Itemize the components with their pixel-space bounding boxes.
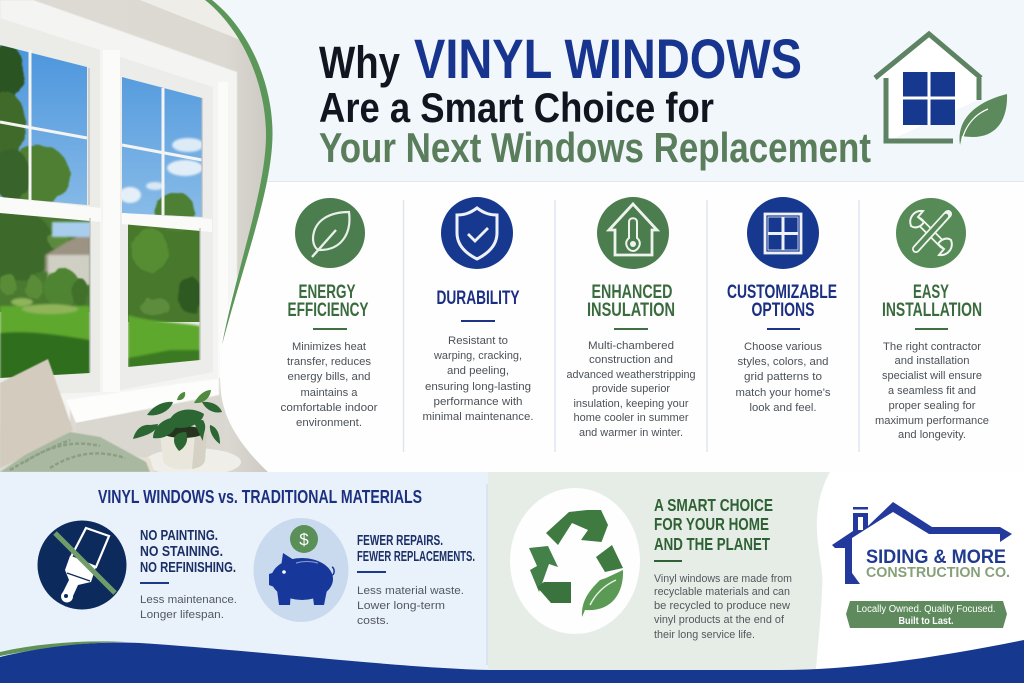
panel: customizable options: CUSTOMIZABLE bbox=[727, 281, 837, 303]
text: smart choice: Vinyl windows are made from bbox=[654, 573, 792, 585]
icon: logo roof bbox=[832, 502, 1012, 584]
text: no painting: NO REFINISHING. bbox=[140, 559, 236, 576]
panel: customizable options: Choose various bbox=[744, 341, 823, 353]
text: no painting: NO STAINING. bbox=[140, 543, 223, 560]
panel: enhanced insulation: and warmer in winter. bbox=[579, 427, 683, 439]
icon: house with leaf bbox=[873, 32, 1007, 145]
footer wave bbox=[0, 640, 1024, 683]
panel: energy efficiency: Minimizes heat bbox=[292, 341, 366, 353]
panel: easy installation: INSTALLATION bbox=[882, 299, 982, 321]
panel: easy installation: maximum performance bbox=[875, 415, 989, 427]
logo: siding and more: CONSTRUCTION CO. bbox=[866, 565, 1010, 581]
text: fewer repairs: Less material waste. bbox=[357, 585, 464, 597]
icon: no paint brush bbox=[38, 520, 126, 610]
text: smart choice: recyclable materials and can bbox=[654, 586, 790, 598]
text: no painting bbox=[140, 527, 237, 621]
outdoor view bbox=[0, 40, 210, 380]
panel: window photo bbox=[0, 0, 280, 476]
panel: enhanced insulation: INSULATION bbox=[587, 299, 675, 321]
panel: easy installation: proper sealing for bbox=[888, 400, 976, 412]
panel: durability: DURABILITY bbox=[436, 287, 520, 309]
text: fewer repairs: FEWER REPLACEMENTS. bbox=[357, 548, 475, 565]
panel: energy efficiency: transfer, reduces bbox=[287, 356, 372, 368]
icon: recycling leaf bbox=[510, 488, 640, 634]
panel: enhanced insulation: advanced weatherstripping bbox=[566, 369, 696, 381]
panel: customizable options: OPTIONS bbox=[752, 299, 814, 321]
text: smart choice: their long service life. bbox=[654, 629, 755, 641]
tagline badge bbox=[846, 601, 1007, 628]
text: smart choice: AND THE PLANET bbox=[654, 534, 770, 554]
panel: customizable options: look and feel. bbox=[750, 402, 816, 414]
tagline badge: Built to Last. bbox=[898, 616, 954, 627]
panel: durability: ensuring long-lasting bbox=[425, 381, 531, 393]
title: Are a Smart Choice for bbox=[319, 84, 714, 131]
logo: siding and more: SIDING & MORE bbox=[866, 547, 1006, 568]
panel: customizable options: styles, colors, and bbox=[738, 356, 828, 368]
panel: enhanced insulation: Multi-chambered bbox=[588, 340, 674, 352]
text: no painting: Less maintenance. bbox=[140, 594, 237, 606]
icon: shield bbox=[441, 197, 513, 269]
panel: enhanced insulation bbox=[566, 197, 696, 439]
panel: energy efficiency: energy bills, and bbox=[288, 371, 370, 383]
panel: customizable options bbox=[727, 197, 837, 414]
panel: energy efficiency: EFFICIENCY bbox=[288, 299, 368, 321]
header background bbox=[0, 0, 1024, 181]
text: smart choice: vinyl products at the end of bbox=[654, 614, 785, 626]
panel: customizable options: grid patterns to bbox=[744, 371, 822, 383]
panel: vinyl vs traditional bbox=[38, 486, 475, 627]
text: smart choice: FOR YOUR HOME bbox=[654, 514, 769, 534]
panel: customizable options: match your home's bbox=[736, 387, 831, 399]
panel: easy installation: and installation bbox=[894, 355, 970, 367]
text: no painting: Longer lifespan. bbox=[140, 609, 224, 621]
text: smart choice bbox=[654, 495, 792, 641]
window casing bbox=[0, 0, 237, 426]
throw blanket bbox=[0, 432, 150, 472]
curved green border bbox=[205, 0, 273, 345]
panel: easy installation: specialist will ensure bbox=[882, 370, 982, 382]
panel: durability: performance with bbox=[434, 396, 522, 408]
tagline badge: Locally Owned. Quality Focused. bbox=[856, 604, 996, 615]
icon: piggy bank bbox=[254, 518, 348, 622]
panel: energy efficiency: environment. bbox=[296, 417, 362, 429]
icon: house thermometer bbox=[597, 197, 669, 269]
panel: easy installation: The right contractor bbox=[883, 341, 981, 353]
panel: durability: warping, cracking, bbox=[433, 350, 522, 362]
panel: enhanced insulation: construction and bbox=[589, 354, 673, 366]
icon: window bbox=[747, 197, 819, 269]
icon: tools bbox=[896, 198, 966, 268]
window muntins bbox=[0, 50, 202, 215]
panel: energy efficiency: comfortable indoor bbox=[280, 402, 378, 414]
title bbox=[319, 27, 871, 171]
panel: durability bbox=[422, 197, 534, 423]
title: Why bbox=[319, 37, 400, 88]
panel: enhanced insulation: ENHANCED bbox=[592, 281, 672, 303]
panel: energy efficiency: ENERGY bbox=[298, 281, 356, 303]
panel: enhanced insulation: insulation, keeping your bbox=[574, 398, 689, 410]
panel: durability: Resistant to bbox=[448, 335, 508, 347]
title: VINYL WINDOWS bbox=[414, 27, 802, 90]
panel: durability: minimal maintenance. bbox=[422, 411, 534, 423]
panel: durability: and peeling, bbox=[447, 365, 509, 377]
side table bbox=[148, 448, 241, 472]
text: fewer repairs: FEWER REPAIRS. bbox=[357, 532, 443, 549]
panel: vinyl vs traditional: VINYL WINDOWS vs. TRADITIONAL MATERIALS bbox=[98, 486, 422, 507]
title: Your Next Windows Replacement bbox=[319, 124, 871, 171]
panel: easy installation: a seamless fit and bbox=[888, 385, 976, 397]
panel: energy efficiency: maintains a bbox=[300, 387, 358, 399]
sill bbox=[66, 378, 219, 423]
text: no painting: NO PAINTING. bbox=[140, 527, 218, 544]
panel: easy installation: and longevity. bbox=[898, 429, 966, 441]
icon: piggy bank: $ bbox=[299, 530, 309, 549]
logo: siding and more bbox=[832, 502, 1012, 628]
text: smart choice: A SMART CHOICE bbox=[654, 495, 773, 515]
panel: enhanced insulation: home cooler in summer bbox=[574, 412, 689, 424]
text: fewer repairs: Lower long-term bbox=[357, 600, 445, 612]
pillow bbox=[0, 359, 73, 468]
text: smart choice: be recycled to produce new bbox=[654, 600, 790, 612]
panel: energy efficiency bbox=[280, 198, 378, 429]
panel: smart choice bbox=[510, 488, 792, 641]
text: fewer repairs bbox=[357, 532, 475, 627]
column dividers bbox=[404, 200, 859, 452]
icon: leaf bbox=[295, 198, 365, 268]
panel: bottom background bbox=[0, 472, 1024, 683]
potted plant bbox=[133, 390, 222, 469]
text: fewer repairs: costs. bbox=[357, 615, 389, 627]
panel: easy installation bbox=[875, 198, 989, 441]
panel: easy installation: EASY bbox=[913, 281, 949, 303]
panel: enhanced insulation: provide superior bbox=[592, 383, 670, 395]
